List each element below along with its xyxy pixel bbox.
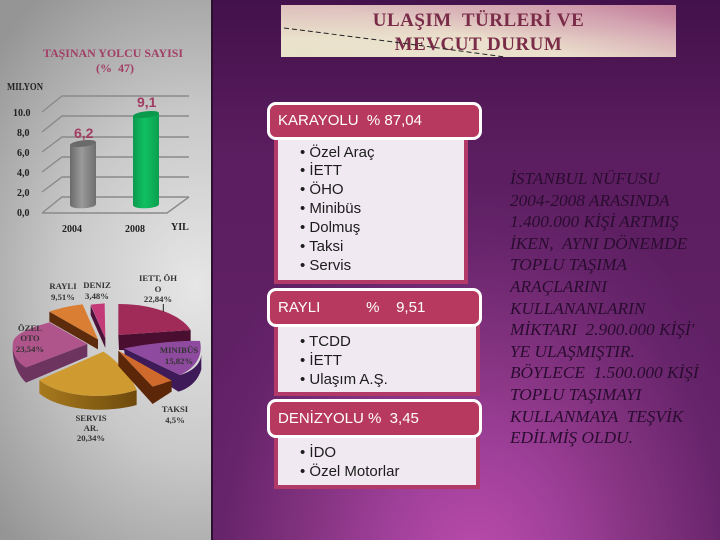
heading: karayolu [267, 102, 482, 140]
axis labels: 2004 [62, 224, 82, 235]
slice: ozel oto [13, 322, 87, 383]
slice: deniz [91, 303, 105, 348]
pie labels: 15,82% [165, 356, 193, 366]
title: ULAŞIM TÜRLERİ VE [373, 10, 584, 31]
pie labels: IETT, ÖH [139, 273, 177, 283]
value labels: 9,1 [137, 94, 157, 110]
pie chart: transport share [13, 303, 201, 410]
value labels: 6,2 [74, 125, 94, 141]
panel edge [211, 0, 213, 540]
pie labels: RAYLI [49, 281, 77, 291]
slice: minibus [124, 341, 201, 392]
panel: denizyolu list background [274, 430, 480, 489]
chart title [43, 46, 183, 75]
panel: karayolu list background [274, 136, 468, 284]
heading: denizyolu: DENİZYOLU % 3,45 [278, 410, 419, 427]
title background [281, 5, 676, 57]
pie labels: DENIZ [83, 280, 111, 290]
bar: 2004 [70, 139, 96, 208]
panel: rayli list background [274, 320, 480, 396]
pie labels: TAKSI [162, 404, 189, 414]
panel: charts [7, 46, 202, 443]
decorative dashed line [284, 28, 504, 58]
pie labels: 20,34% [77, 433, 105, 443]
pie labels: AR. [84, 423, 98, 433]
list: denizyolu: • İDO • Özel Motorlar [300, 444, 399, 480]
axis labels: 10.0 [13, 108, 30, 119]
heading: karayolu: KARAYOLU % 87,04 [278, 112, 422, 129]
list: rayli: • TCDD • İETT • Ulaşım A.Ş. [300, 333, 388, 388]
axis labels: 8,0 [17, 128, 30, 139]
heading: rayli [267, 288, 482, 327]
axis labels: 6,0 [17, 148, 30, 159]
value labels [74, 94, 157, 141]
heading: denizyolu [267, 399, 482, 438]
pie labels: 23,54% [16, 344, 44, 354]
axis labels: 0,0 [17, 208, 30, 219]
axis labels [7, 82, 189, 235]
pie labels: 4,5% [165, 415, 185, 425]
slice: rayli [49, 304, 98, 349]
axis labels: MILYON [7, 82, 44, 93]
axis labels: 2,0 [17, 188, 30, 199]
list: karayolu: • Özel Araç • İETT • ÖHO • Minibüs • Dolmuş • Taksi • Servis [300, 144, 374, 274]
bar chart: passengers [7, 82, 189, 235]
text block: summary: İSTANBUL NÜFUSU 2004-2008 ARASINDA 1.400.000 KİŞİ ARTMIŞ İKEN, AYNI DÖNEMDE TOPLU TAŞIMA ARAÇLARINI KULLANANLARIN MİKTARI 2.900.000 KİŞİ' YE ULAŞMIŞTIR. BÖYLECE 1.500.000 KİŞİ TOPLU TAŞIMAYI KULLANMAYA TEŞVİK EDİLMİŞ OLDU. [510, 169, 699, 447]
axis labels: 2008 [125, 224, 145, 235]
pie labels: MINIBÜS [160, 345, 198, 355]
title [373, 10, 584, 55]
pie labels: OTO [20, 333, 40, 343]
axis labels: YIL [171, 222, 189, 233]
pie labels: O [155, 284, 162, 294]
chart title: (% 47) [96, 61, 134, 75]
panel: left charts background [0, 0, 211, 540]
bar: 2008 [133, 110, 159, 208]
slice: IETT OHO [118, 304, 191, 350]
pie labels: ÖZEL [18, 323, 42, 333]
pie labels: SERVIS [75, 413, 107, 423]
slice: taxi [118, 351, 172, 404]
axis labels: 4,0 [17, 168, 30, 179]
pie labels: 3,48% [85, 291, 109, 301]
pie labels [16, 273, 198, 443]
chart title: TAŞINAN YOLCU SAYISI [43, 46, 183, 60]
slice: servis [39, 352, 137, 410]
title: MEVCUT DURUM [395, 34, 562, 55]
pie labels: 22,84% [144, 294, 172, 304]
pie labels: 9,51% [51, 292, 75, 302]
heading: rayli: RAYLI % 9,51 [278, 299, 425, 316]
